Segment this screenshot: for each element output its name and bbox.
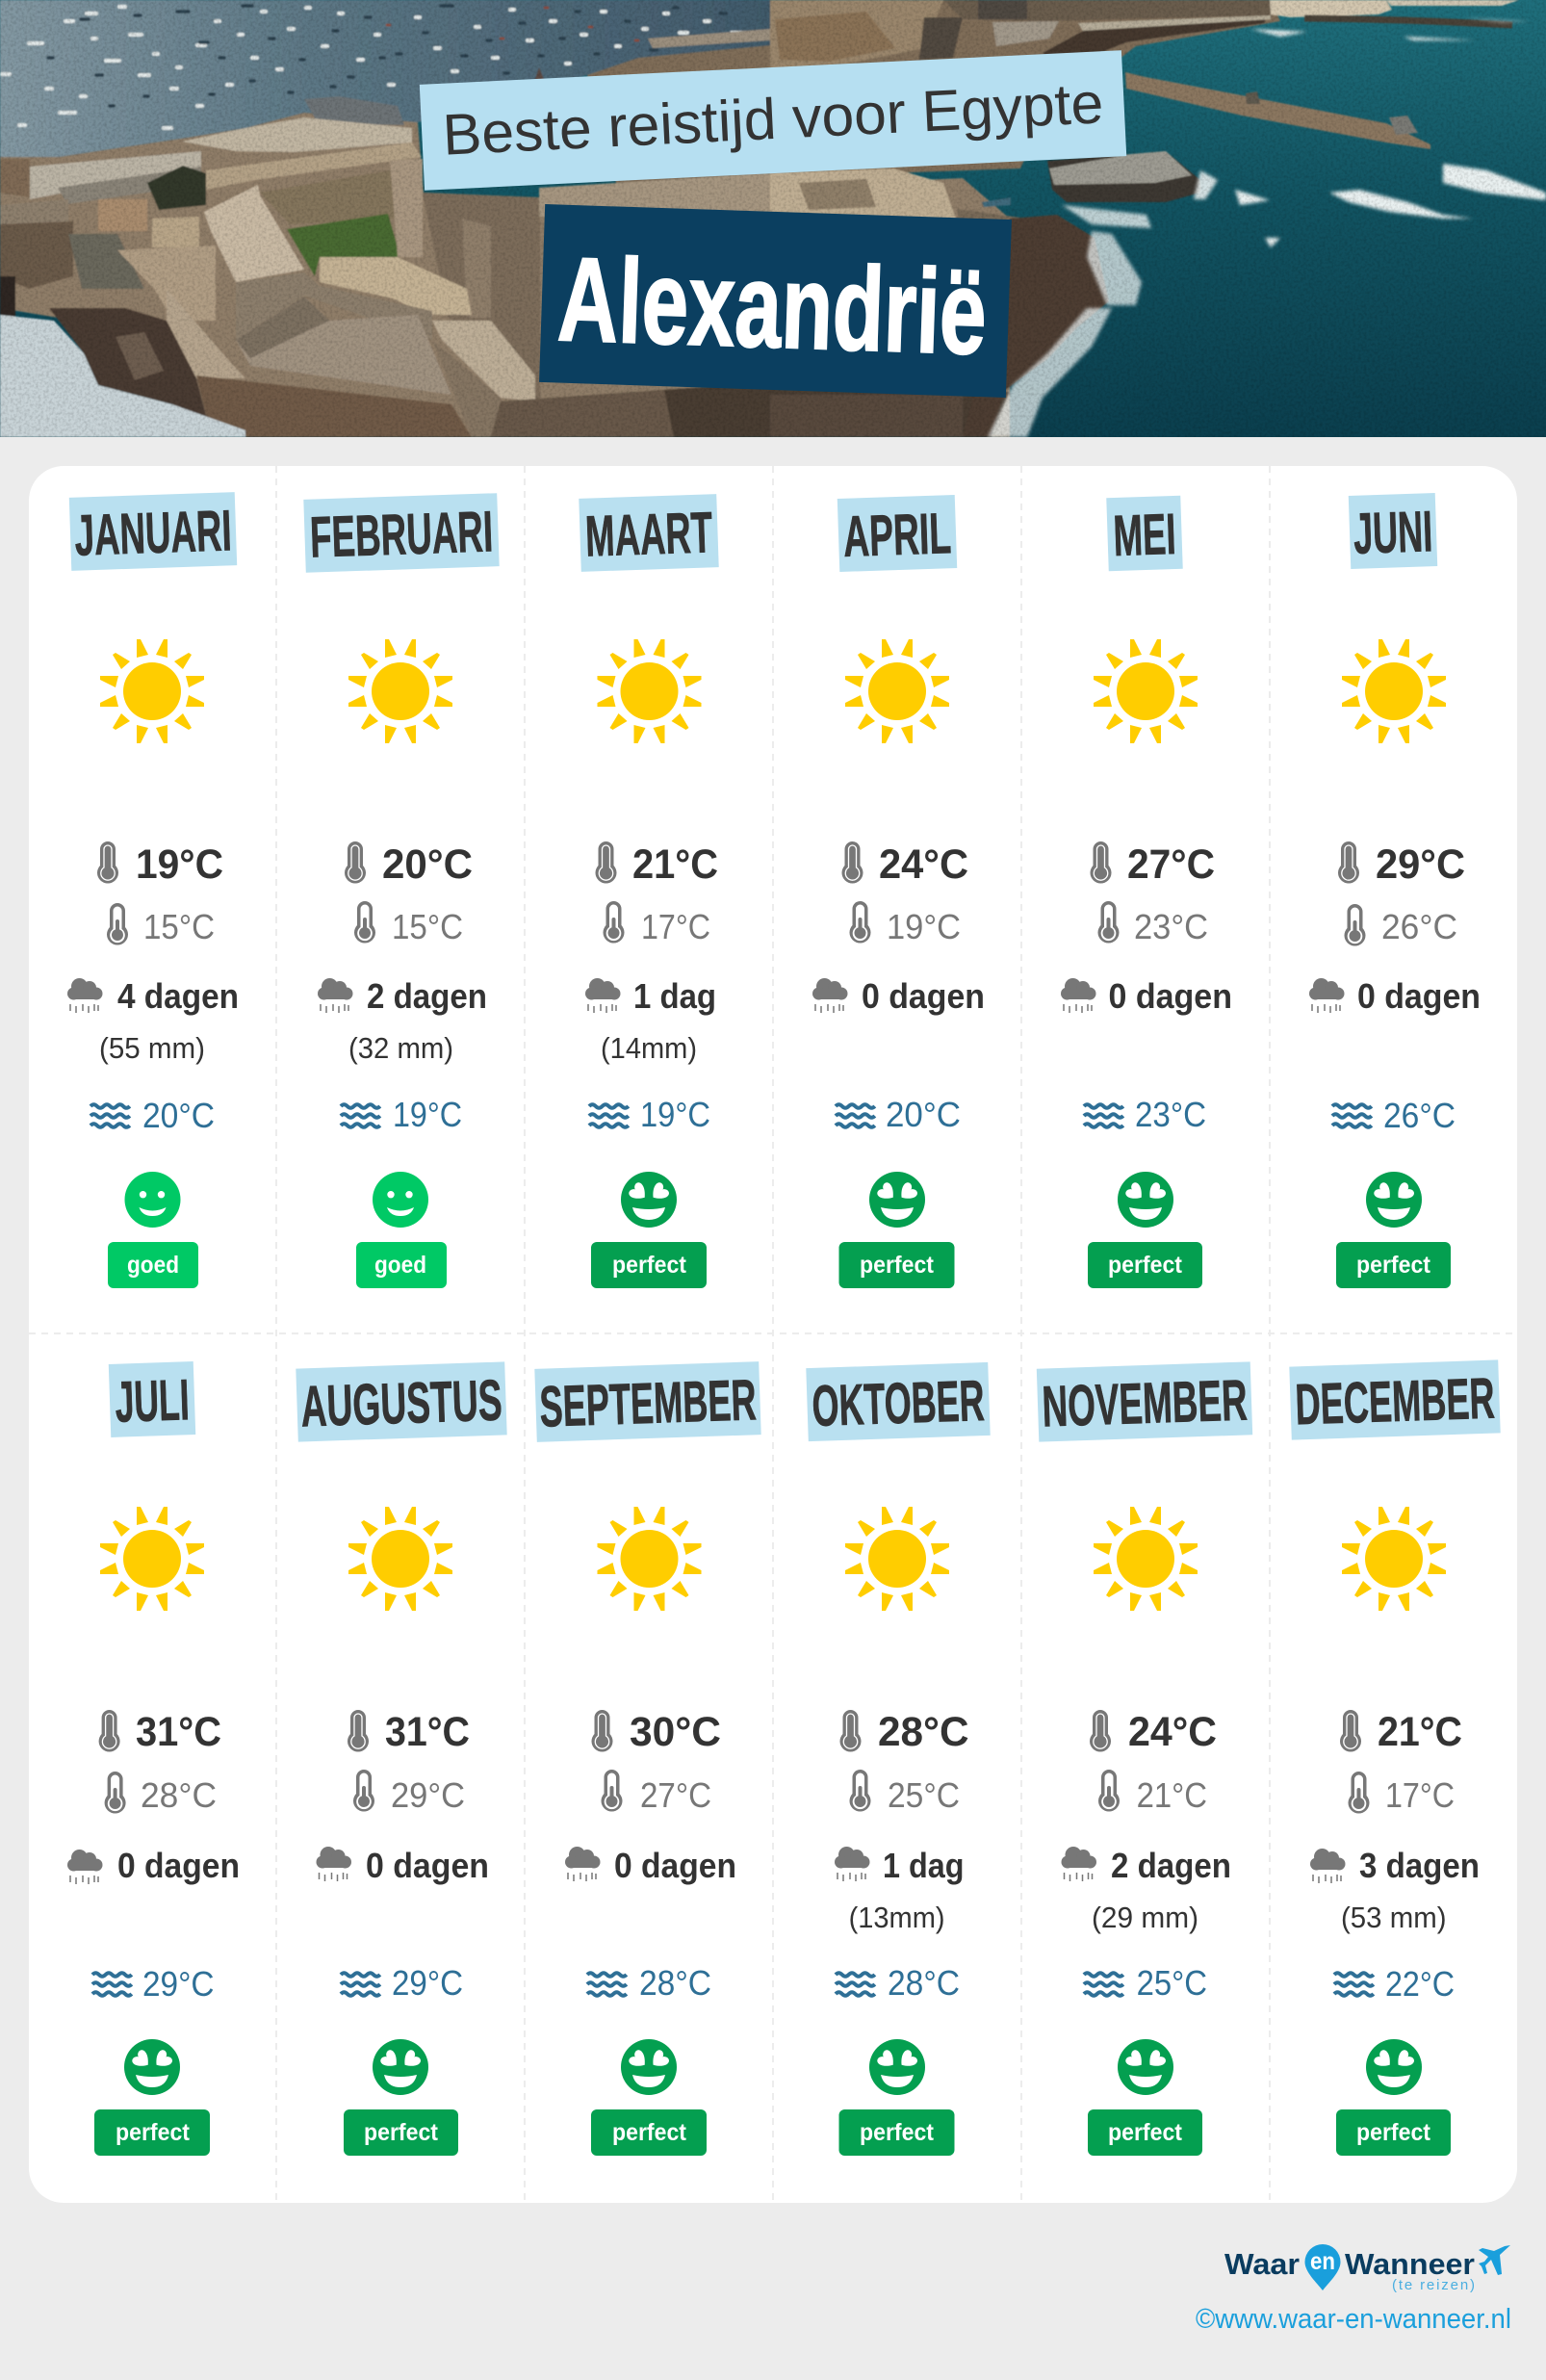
sea temperature: 25°C [1137,1963,1207,2003]
max temperature: 28°C [878,1709,968,1755]
copyright link: ©www.waar-en-wanneer.nl [1196,2304,1511,2335]
max temperature: 19°C [136,841,223,888]
month label [69,492,237,571]
max temperature [841,841,968,888]
max temperature [1090,1709,1217,1755]
rain days [565,1846,736,1885]
max temperature: 31°C [136,1709,221,1755]
rating: perfect [1088,2039,1202,2156]
min temperature: 17°C [641,907,710,946]
month label: JANUARI [73,498,233,568]
min temperature: 29°C [391,1775,465,1815]
panel: Februari [303,493,500,1288]
max temperature: 24°C [879,841,968,888]
rating: goed: goed [127,1252,179,1279]
rain days: 1 dag [883,1846,965,1885]
rain days [1061,1846,1231,1934]
rating: perfect: perfect [860,2119,935,2146]
month label [109,1361,195,1437]
rating: perfect [1336,2039,1451,2156]
rating: perfect [591,1172,707,1288]
sea temperature [341,1963,463,2003]
icon: sun [845,1507,949,1611]
min temperature [353,1770,465,1815]
max temperature: 20°C [382,841,473,888]
logo: Waar en Wanneer: Waar [1224,2247,1300,2281]
month label [303,493,500,573]
sea temperature [1332,1096,1456,1135]
sea temperature: 26°C [1383,1096,1456,1135]
rain days [1309,976,1481,1016]
month label: NOVEMBER [1041,1367,1249,1439]
max temperature [839,1709,968,1755]
max temperature: 21°C [1378,1709,1462,1755]
panel: Oktober [806,1362,991,2156]
min temperature: 19°C [887,907,961,946]
month label: MEI [1112,502,1177,568]
icon: sun [1094,639,1198,743]
month label [837,495,957,572]
max temperature: 31°C [385,1709,470,1755]
rating: perfect: perfect [1108,1252,1183,1279]
max temperature: 21°C [632,841,718,888]
max temperature [595,841,718,888]
sea temperature [92,1964,214,2004]
min temperature [601,1770,711,1815]
rating: perfect: perfect [860,1252,935,1279]
rain days [835,1846,965,1934]
sea temperature [836,1095,961,1134]
max temperature [348,1709,470,1755]
max temperature [1338,841,1465,888]
min temperature [603,901,710,946]
rating: goed: goed [374,1252,426,1279]
logo: Waar en Wanneer [1224,2244,1510,2293]
rain days: (13mm) [849,1901,945,1934]
max temperature [345,841,473,888]
sea temperature [589,1095,710,1134]
panel: Mei [1061,496,1232,1288]
sea temperature: 22°C [1385,1964,1455,2004]
panel: Augustus [296,1361,507,2156]
panel: Maart [579,494,719,1288]
panel: April [812,495,985,1288]
sea temperature [90,1096,215,1135]
max temperature [97,841,223,888]
icon: sun [100,639,204,743]
icon: map pin [1305,2244,1340,2290]
rain days: 2 dagen [367,976,487,1016]
rating: perfect: perfect [1356,1252,1431,1279]
rain days [585,976,716,1065]
icon: sun [1342,639,1446,743]
panel: September [534,1361,761,2156]
rain days [67,976,239,1065]
rating: goed [108,1172,198,1288]
rain days: 1 dag [633,976,716,1016]
icon: airplane [1479,2245,1510,2275]
panel: calendar card [29,466,1517,2203]
rain days: 0 dagen [614,1846,736,1885]
panel: Juli [67,1361,240,2156]
max temperature: 27°C [1127,841,1215,888]
min temperature [105,1772,217,1815]
rain days: (32 mm) [348,1031,453,1065]
rating: perfect [1088,1172,1202,1288]
min temperature: 27°C [640,1775,711,1815]
rating: perfect [344,2039,458,2156]
month label [296,1361,507,1442]
rain days: (14mm) [601,1031,697,1065]
rain days [316,1846,489,1885]
min temperature [107,903,215,946]
panel: Juni [1309,493,1481,1288]
max temperature [1340,1709,1462,1755]
min temperature [849,901,961,946]
sea temperature: 19°C [640,1095,710,1134]
min temperature [1344,904,1457,946]
month label: JULI [114,1367,191,1435]
logo: Waar en Wanneer: en [1310,2248,1335,2275]
sea temperature [1334,1964,1455,2004]
min temperature: 26°C [1381,907,1457,946]
header photo: Alexandria citadel and harbour [0,0,1546,437]
sea temperature: 28°C [888,1963,960,2003]
sea temperature: 29°C [142,1964,214,2004]
rain days [1061,976,1232,1016]
rain days [67,1846,240,1885]
rain days: 0 dagen [1357,976,1481,1016]
rain days: (53 mm) [1341,1901,1446,1934]
rain days: 3 dagen [1359,1846,1480,1885]
min temperature [354,901,463,946]
month label: JUNI [1353,499,1433,566]
title strip: Beste reistijd voor Egypte: Beste reistijd voor Egypte [441,70,1105,168]
sea temperature: 20°C [142,1096,215,1135]
rating: perfect [591,2039,707,2156]
max temperature: 29°C [1376,841,1465,888]
rating: perfect [839,2039,955,2156]
rating: perfect: perfect [116,2119,191,2146]
rating: perfect: perfect [612,1252,687,1279]
sea temperature: 19°C [393,1095,462,1134]
sea temperature: 20°C [886,1095,961,1134]
month label [806,1362,991,1441]
min temperature: 21°C [1137,1775,1207,1815]
month label [1349,493,1437,569]
icon: sun [348,1507,452,1611]
month label: AUGUSTUS [299,1368,503,1438]
logo: Waar en Wanneer: Wanneer [1345,2247,1475,2281]
sea temperature: 29°C [392,1963,463,2003]
logo: Waar en Wanneer: (te reizen) [1392,2277,1475,2293]
max temperature [1090,841,1215,888]
rain days: 2 dagen [1111,1846,1231,1885]
month label: FEBRUARI [309,499,494,570]
min temperature [1348,1772,1455,1815]
rating: perfect [839,1172,955,1288]
sea temperature [587,1963,711,2003]
rating: perfect: perfect [612,2119,687,2146]
sea temperature: 23°C [1135,1095,1206,1134]
rain days [812,976,985,1016]
month label: MAART [584,500,713,569]
icon: sun [1342,1507,1446,1611]
min temperature: 25°C [888,1775,960,1815]
rain days: (29 mm) [1092,1901,1198,1934]
rating: perfect [94,2039,210,2156]
rain days: 0 dagen [117,1846,240,1885]
min temperature: 23°C [1134,907,1208,946]
panel: December [1289,1359,1501,2156]
min temperature [1098,1770,1207,1815]
icon: sun [100,1507,204,1611]
icon: sun [348,639,452,743]
panel: Januari [67,492,239,1288]
min temperature: 28°C [141,1775,217,1815]
rain days [318,976,487,1065]
rating: perfect: perfect [364,2119,439,2146]
min temperature: 17°C [1385,1775,1455,1815]
icon: sun [845,639,949,743]
month label [1037,1361,1252,1442]
min temperature [849,1770,960,1815]
sea temperature [1084,1963,1207,2003]
min temperature [1097,901,1208,946]
rating: perfect: perfect [1356,2119,1431,2146]
rain days: 0 dagen [862,976,985,1016]
month label [579,494,719,572]
rain days: (55 mm) [99,1031,205,1065]
sea temperature: 28°C [639,1963,711,2003]
sea temperature [1084,1095,1206,1134]
rain days: 0 dagen [1109,976,1232,1016]
title strip: Alexandrië [539,204,1012,398]
min temperature: 15°C [392,907,463,946]
rating: perfect: perfect [1108,2119,1183,2146]
month label [1106,496,1183,571]
min temperature: 15°C [143,907,215,946]
max temperature: 30°C [630,1709,721,1755]
sea temperature [836,1963,960,2003]
rating: goed [356,1172,447,1288]
max temperature [99,1709,221,1755]
title strip: Alexandrië: Alexandrië [556,233,989,380]
icon: sun [597,639,701,743]
month label: OKTOBER [811,1368,986,1438]
month label: SEPTEMBER [539,1367,758,1439]
sea temperature [341,1095,462,1134]
rain days [1310,1846,1480,1934]
rain days: 0 dagen [366,1846,489,1885]
month label [534,1361,761,1442]
month label: APRIL [842,501,952,569]
max temperature: 24°C [1128,1709,1217,1755]
title strip: Beste reistijd voor Egypte [420,50,1126,191]
panel: November [1037,1361,1252,2156]
rating: perfect [1336,1172,1451,1288]
rain days: 4 dagen [117,976,239,1016]
icon: sun [597,1507,701,1611]
icon: sun [1094,1507,1198,1611]
